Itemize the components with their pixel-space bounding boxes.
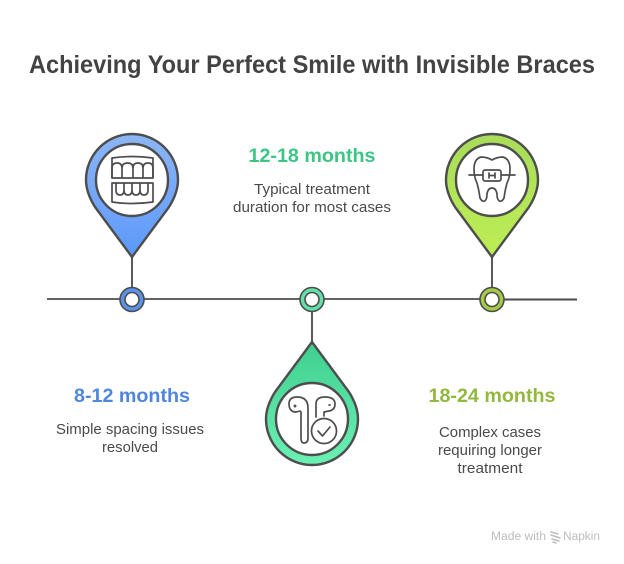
pin inner circle: blue [96, 144, 168, 216]
icon: tooth with braces [469, 157, 515, 201]
timeline node: green [302, 290, 322, 309]
pin marker: green [266, 342, 358, 465]
description: typical treatment: duration for most cases [233, 200, 391, 216]
description: typical treatment [233, 182, 391, 216]
text block: 12-18 months [233, 146, 391, 216]
pin marker: blue [86, 134, 178, 257]
description: simple spacing: resolved [102, 440, 158, 456]
watermark: made with napkin [491, 531, 600, 543]
node outline: green [300, 288, 324, 312]
milestone: 12-18 months pin [266, 288, 358, 465]
watermark: made with napkin: Napkin [563, 531, 600, 543]
milestone: 18-24 months pin [446, 134, 538, 312]
icon: napkin logo [551, 532, 560, 543]
description: simple spacing: Simple spacing issues [56, 422, 204, 438]
connector: blue pin to node [131, 257, 133, 290]
description: typical treatment: Typical treatment [254, 182, 370, 198]
text block: 18-24 months [428, 386, 556, 477]
node outline: blue [120, 288, 144, 312]
title: Achieving Your Perfect Smile with Invisible Braces [29, 51, 595, 79]
connector: lime pin to node [491, 257, 493, 290]
icon: aligner case with check [289, 397, 336, 444]
description: complex cases: requiring longer [438, 443, 542, 459]
description: simple spacing [56, 422, 204, 456]
text block: 8-12 months [56, 386, 204, 456]
heading: 8-12 months: 8-12 months [74, 386, 190, 407]
pin inner circle: lime [456, 144, 528, 216]
timeline node: lime [482, 290, 502, 309]
description: complex cases [438, 425, 542, 477]
description: complex cases: treatment [458, 461, 522, 477]
node outline: lime [480, 288, 504, 312]
milestone: 8-12 months pin [86, 134, 178, 312]
description: complex cases: Complex cases [439, 425, 541, 441]
timeline node: blue [122, 290, 142, 309]
heading: 12-18 months: 12-18 months [248, 146, 376, 167]
icon: teeth [112, 156, 153, 204]
pin marker: lime [446, 134, 538, 257]
timeline line [47, 298, 577, 300]
heading: 18-24 months: 18-24 months [428, 386, 556, 407]
connector: green pin to node [311, 309, 313, 342]
pin inner circle: green [276, 383, 348, 455]
watermark: made with napkin: Made with [491, 531, 546, 543]
